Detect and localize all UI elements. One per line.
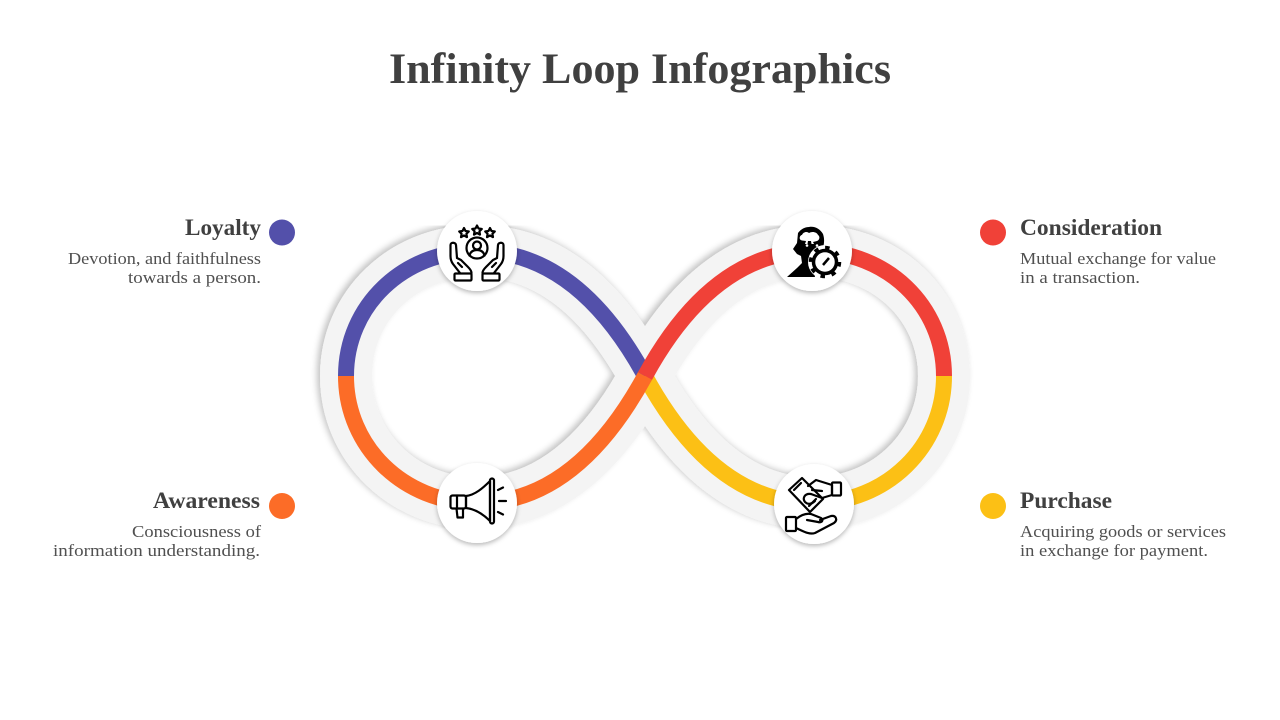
label: loyalty (68, 215, 295, 287)
description: awareness (53, 522, 261, 560)
dot: loyalty (269, 220, 295, 246)
icon: hands exchanging money (774, 464, 854, 544)
label: purchase (980, 488, 1226, 560)
description: consideration: Mutual exchange for value (1020, 249, 1216, 268)
title: Infinity Loop Infographics (389, 46, 891, 93)
loyalty arc (346, 251, 645, 376)
icon: hands with person and stars (437, 211, 517, 291)
dot: awareness (269, 493, 295, 519)
heading: awareness: Awareness (153, 488, 260, 513)
icon: megaphone (437, 463, 517, 543)
description: purchase: Acquiring goods or services (1020, 522, 1226, 541)
description: awareness: information understanding. (53, 541, 260, 560)
heading: purchase: Purchase (1020, 488, 1112, 513)
heading: loyalty: Loyalty (185, 215, 262, 240)
consideration arc (645, 251, 944, 376)
description: purchase: in exchange for payment. (1020, 541, 1208, 560)
heading: consideration: Consideration (1020, 215, 1162, 240)
description: consideration: in a transaction. (1020, 268, 1140, 287)
dot: purchase (980, 493, 1006, 519)
purchase arc (645, 376, 944, 503)
label: consideration (980, 215, 1216, 287)
grey loop band (346, 251, 944, 503)
dot: consideration (980, 220, 1006, 246)
icon: head with gear (772, 211, 852, 291)
description: loyalty: towards a person. (128, 268, 261, 287)
description: loyalty (68, 249, 261, 287)
description: consideration (1020, 249, 1216, 287)
description: awareness: Consciousness of (132, 522, 261, 541)
awareness arc (346, 376, 645, 503)
description: loyalty: Devotion, and faithfulness (68, 249, 261, 268)
description: purchase (1020, 522, 1226, 560)
infinity loop diagram (346, 251, 944, 503)
label: awareness (53, 488, 295, 560)
